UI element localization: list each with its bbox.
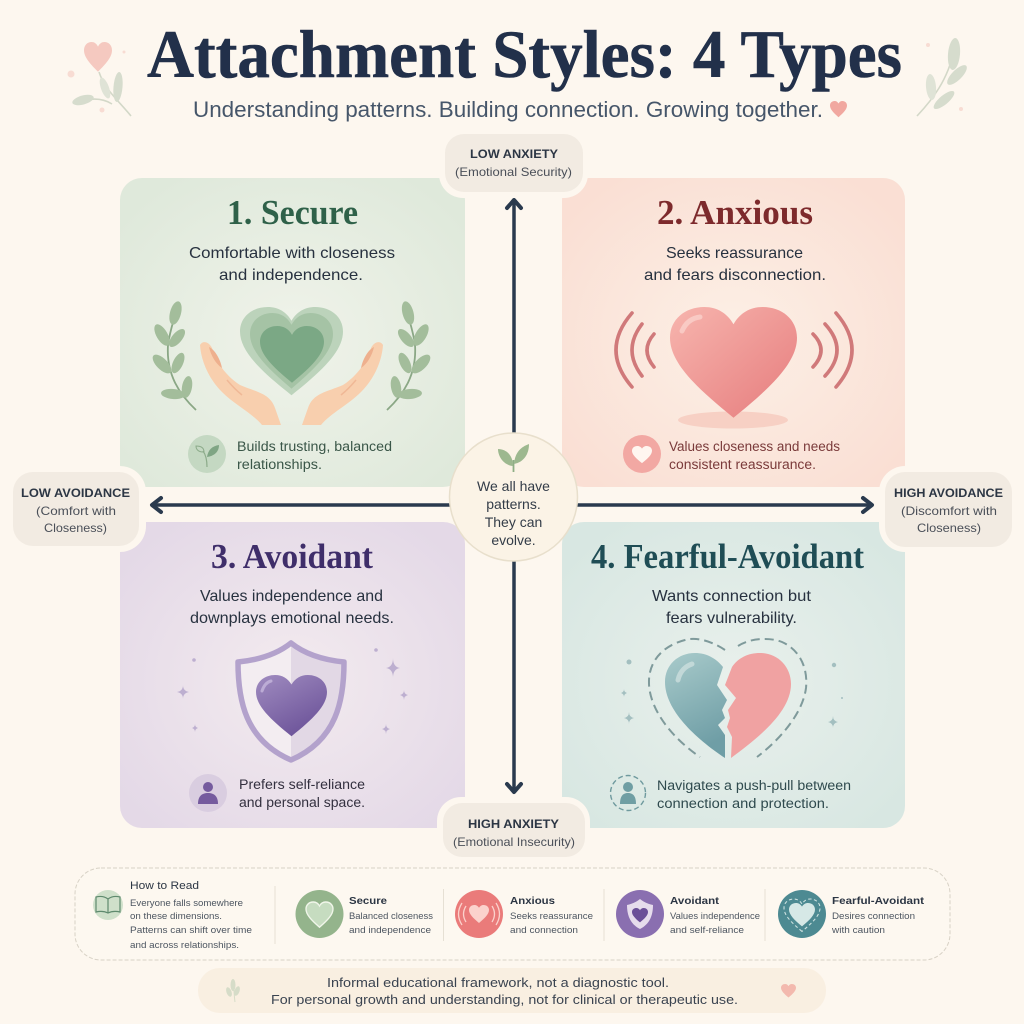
- icon: avoidant sparkles: [177, 648, 408, 734]
- how to read block: [93, 880, 252, 951]
- center callout: [450, 433, 578, 561]
- axis label: low avoidance: (Comfort with: [36, 504, 116, 518]
- legend item: secure: Secure: [349, 895, 387, 907]
- icon: left floral decoration: [68, 42, 131, 116]
- description: avoidant: Values independence and: [200, 588, 383, 605]
- axis label: high anxiety: HIGH ANXIETY: [468, 817, 559, 831]
- footer disclaimer: [198, 968, 826, 1013]
- icon: subtitle heart: [830, 101, 847, 117]
- description: anxious: [644, 245, 826, 284]
- axis label: high anxiety: (Emotional Insecurity): [453, 835, 575, 849]
- note: secure: relationships.: [237, 457, 322, 472]
- how to read block: and across relationships.: [130, 940, 239, 951]
- axis label: low avoidance: LOW AVOIDANCE: [21, 486, 130, 500]
- note: fearful-avoidant: connection and protection.: [657, 796, 829, 811]
- how to read block: on these dimensions.: [130, 911, 222, 922]
- icon: heart highlight: [678, 664, 692, 680]
- icon: footer sprig: [225, 979, 241, 1002]
- how to read block: How to Read: [130, 880, 199, 892]
- description: secure: Comfortable with closeness: [189, 245, 395, 262]
- icon: heart shadow: [678, 412, 788, 428]
- legend item: secure: Balanced closeness: [349, 911, 433, 922]
- heading: anxious: 2. Anxious: [657, 193, 813, 232]
- icon: sprout badge: [188, 435, 226, 473]
- legend item: avoidant: Avoidant: [670, 895, 720, 907]
- how to read block: Patterns can shift over time: [130, 925, 252, 936]
- icon: broken heart left half: [665, 653, 727, 758]
- note: anxious: Values closeness and needs: [669, 439, 840, 454]
- description: avoidant: downplays emotional needs.: [190, 610, 394, 627]
- icon: shield with heart: [238, 643, 344, 760]
- center callout: patterns.: [486, 496, 541, 512]
- footer disclaimer: Informal educational framework, not a diagnostic tool.: [327, 975, 669, 990]
- icon: layered green heart: [240, 307, 343, 395]
- icon: book: [93, 890, 123, 920]
- icon: dashed person badge: [610, 776, 646, 810]
- title: Attachment Styles: 4 Types: [147, 16, 902, 92]
- axis label: low anxiety: (Emotional Security): [455, 165, 572, 179]
- panel: secure: [120, 178, 465, 487]
- icon: left hand: [200, 342, 281, 425]
- heading: secure: 1. Secure: [227, 193, 358, 232]
- icon: right pulse waves: [813, 313, 852, 387]
- legend item: anxious: and connection: [510, 925, 578, 936]
- icon: heart badge: [623, 435, 661, 473]
- center callout: evolve.: [491, 532, 536, 548]
- note: anxious: consistent reassurance.: [669, 457, 816, 472]
- panel: fearful-avoidant: [562, 522, 905, 828]
- note: fearful-avoidant: Navigates a push-pull between: [657, 778, 851, 793]
- panel: avoidant: [120, 522, 465, 828]
- axis label: low anxiety: LOW ANXIETY: [470, 147, 558, 161]
- icon: fearful sparkles: [621, 660, 843, 728]
- note: avoidant: Prefers self-reliance: [239, 777, 365, 792]
- description: secure: and independence.: [219, 267, 363, 284]
- center callout: They can: [485, 514, 542, 530]
- icon: footer heart: [781, 984, 796, 998]
- legend item: fearful-avoidant: [778, 890, 925, 938]
- legend panel: [75, 868, 950, 960]
- heading: avoidant: 3. Avoidant: [211, 537, 373, 576]
- icon: broken heart right half: [725, 653, 791, 758]
- vertical axis arrow: [507, 200, 521, 792]
- legend item: secure: and independence: [349, 925, 431, 936]
- legend item: anxious: Seeks reassurance: [510, 911, 593, 922]
- legend item: fearful-avoidant: Desires connection: [832, 911, 915, 922]
- icon: right floral decoration: [917, 38, 970, 116]
- footer disclaimer: For personal growth and understanding, not for clinical or therapeutic use.: [271, 992, 738, 1007]
- description: fearful-avoidant: Wants connection but: [652, 588, 812, 605]
- note: secure: [237, 439, 392, 472]
- description: anxious: and fears disconnection.: [644, 267, 826, 284]
- heading: fearful-avoidant: 4. Fearful-Avoidant: [591, 537, 864, 576]
- axis label: low anxiety: [439, 128, 588, 198]
- description: fearful-avoidant: [652, 588, 812, 627]
- description: avoidant: [190, 588, 394, 627]
- icon: dashed heart outline: [649, 639, 806, 757]
- description: secure: [189, 245, 395, 284]
- axis label: high avoidance: Closeness): [917, 521, 981, 535]
- icon: person badge: [189, 774, 227, 812]
- axis label: high avoidance: (Discomfort with: [901, 504, 997, 518]
- legend item: fearful-avoidant: with caution: [831, 925, 885, 936]
- icon: right hand: [302, 342, 383, 425]
- legend item: secure: [296, 890, 433, 938]
- axis label: low avoidance: Closeness): [44, 521, 107, 535]
- note: avoidant: and personal space.: [239, 795, 365, 810]
- icon: right laurel: [387, 300, 433, 410]
- axis label: high anxiety: [437, 797, 590, 863]
- subtitle: Understanding patterns. Building connection. Growing together.: [193, 97, 823, 122]
- axis label: high avoidance: HIGH AVOIDANCE: [894, 486, 1003, 500]
- icon: left pulse waves: [616, 313, 654, 387]
- note: secure: Builds trusting, balanced: [237, 439, 392, 454]
- description: anxious: Seeks reassurance: [666, 245, 803, 262]
- legend item: avoidant: Values independence: [670, 911, 760, 922]
- note: fearful-avoidant: [657, 778, 851, 811]
- icon: left laurel: [150, 300, 196, 410]
- axis label: low avoidance: [7, 466, 146, 552]
- legend item: avoidant: [616, 890, 760, 938]
- legend item: fearful-avoidant: Fearful-Avoidant: [832, 895, 925, 907]
- legend item: avoidant: and self-reliance: [670, 925, 744, 936]
- legend item: anxious: [455, 890, 593, 938]
- center callout: We all have: [477, 478, 550, 494]
- icon: center sprout: [498, 444, 529, 472]
- note: anxious: [669, 439, 840, 472]
- horizontal axis arrow: [152, 498, 872, 512]
- panel: anxious: [562, 178, 905, 487]
- icon: pink heart: [670, 307, 797, 418]
- axis label: high avoidance: [879, 466, 1018, 552]
- description: fearful-avoidant: fears vulnerability.: [666, 610, 797, 627]
- legend item: anxious: Anxious: [510, 895, 555, 907]
- note: avoidant: [239, 777, 365, 810]
- how to read block: Everyone falls somewhere: [130, 898, 243, 909]
